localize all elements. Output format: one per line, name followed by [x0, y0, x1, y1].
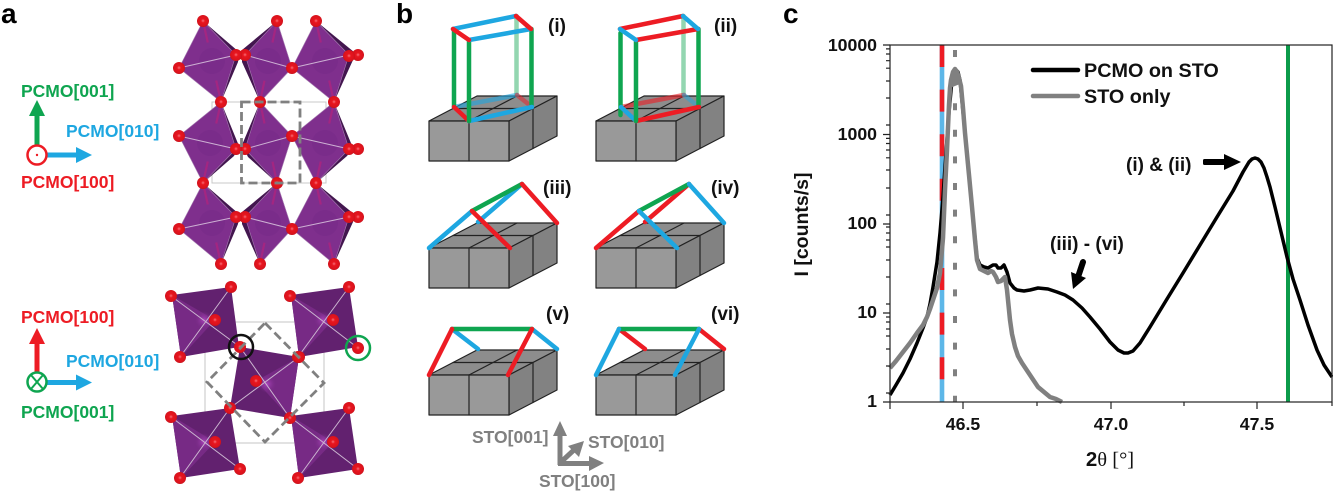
y axis title: I [counts/s]	[791, 172, 813, 277]
y axis tick labels: 10	[857, 302, 877, 322]
panel a: top axes: PCMO[010]	[66, 121, 159, 141]
annotation: i and ii peak	[1126, 154, 1241, 176]
panel b: configuration i: (i)	[548, 16, 566, 37]
panel b: configuration iv	[596, 178, 740, 288]
x axis tick labels: 46.5	[946, 414, 980, 434]
y axis tick labels: 10000	[828, 35, 877, 55]
y axis tick labels: 1000	[838, 124, 877, 144]
panel b: configuration iii: (iii)	[543, 178, 572, 199]
panel b: configuration ii: (ii)	[714, 16, 737, 37]
panel a: top axes	[21, 81, 159, 192]
panel b: STO axes	[472, 421, 665, 491]
panel a: bottom crystal structure top view	[165, 281, 370, 484]
x axis tick labels: 47.5	[1240, 414, 1274, 434]
panel a: bottom axes	[21, 307, 159, 422]
panel a: top axes: PCMO[100]	[21, 172, 114, 192]
legend: PCMO on STO	[1084, 60, 1219, 82]
panel b: configuration vi	[596, 304, 740, 415]
panel b: STO axes: STO[100]	[539, 471, 616, 491]
panel b: configuration i	[429, 16, 566, 161]
panel b: configuration v: (v)	[546, 304, 569, 325]
x axis ticks	[890, 402, 1332, 409]
panel c: XRD plot	[791, 35, 1332, 471]
y axis tick labels: 100	[847, 213, 877, 233]
panel a: bottom axes: PCMO[001]	[21, 402, 114, 422]
y axis tick labels	[828, 35, 877, 411]
plot frame	[890, 45, 1332, 402]
panel a: bottom axes: PCMO[010]	[66, 351, 159, 371]
reference line: STO grey dotted	[953, 50, 957, 402]
peak fill: STO overlap	[950, 69, 960, 88]
y axis tick labels: 1	[867, 391, 877, 411]
panel b: configuration vi: (vi)	[711, 304, 740, 325]
x axis tick labels: 47.0	[1094, 414, 1128, 434]
curve: PCMO on STO	[890, 70, 1332, 395]
panel a: top crystal structure side view	[173, 15, 364, 270]
panel b: configuration ii	[596, 16, 737, 161]
curve: STO only	[890, 69, 1062, 402]
legend	[1033, 60, 1219, 108]
reference line: PCMO red and blue dashed	[940, 45, 944, 402]
panel b: configuration iv: (iv)	[711, 178, 740, 199]
annotation: i and ii peak: (i) & (ii)	[1126, 155, 1191, 176]
panel b: STO axes: STO[010]	[588, 432, 665, 452]
panel a: bottom axes: PCMO[100]	[21, 307, 114, 327]
panel b: configuration iii	[429, 178, 572, 288]
reference line: green	[1286, 45, 1290, 402]
annotation: iii to vi shoulder	[1050, 234, 1124, 289]
legend: STO only	[1084, 86, 1170, 108]
annotation: iii to vi shoulder: (iii) - (vi)	[1050, 234, 1124, 255]
panel b: STO axes: STO[001]	[472, 427, 549, 447]
x axis title: 2θ [°]	[1086, 448, 1134, 471]
x axis tick labels	[946, 414, 1274, 434]
panel a: top axes: PCMO[001]	[21, 81, 114, 101]
panel b: configuration v	[429, 304, 569, 415]
y axis ticks	[883, 45, 890, 402]
